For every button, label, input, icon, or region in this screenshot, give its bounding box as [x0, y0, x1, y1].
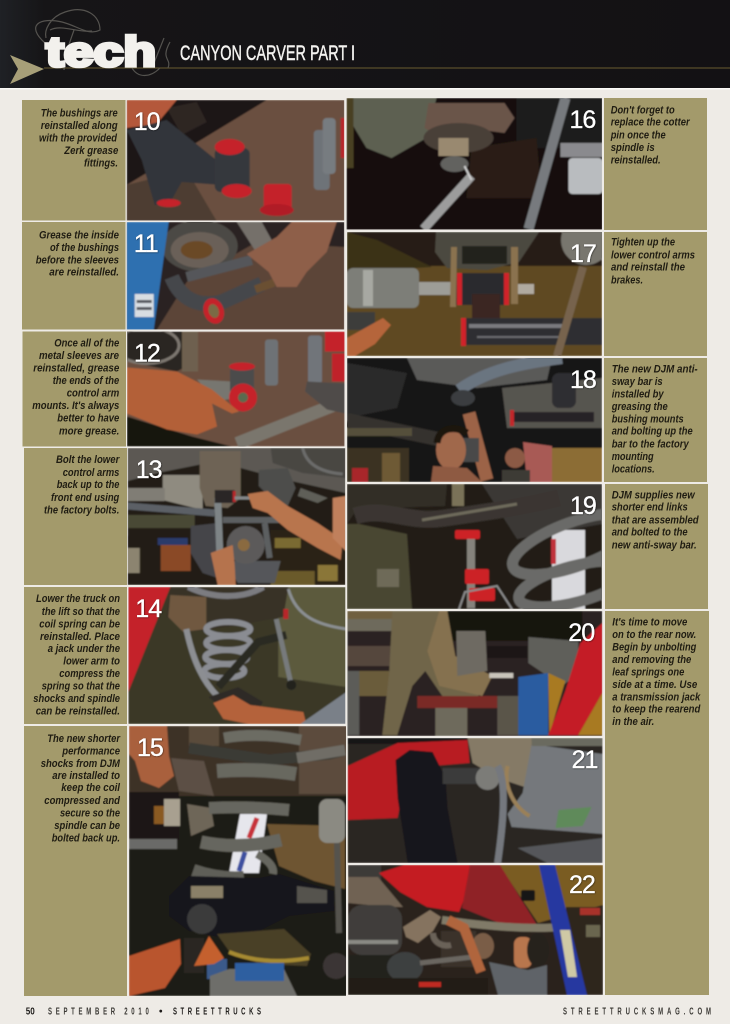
step number: 19 [570, 492, 596, 520]
footer: 50 [26, 1006, 35, 1018]
caption panel: step 14: the lift so that the [42, 606, 120, 618]
caption panel: step 14: a jack under the [48, 643, 120, 655]
caption panel: step 14: shocks and spindle [33, 693, 120, 705]
photo: step 17 [347, 232, 602, 356]
caption panel: step 18: bushing mounts [612, 413, 684, 425]
caption panel: step 12: the ends of the [53, 375, 119, 387]
caption panel: step 14: spring so that the [42, 681, 120, 693]
caption panel: step 15: secure so the [60, 808, 120, 820]
step number: 15 [137, 734, 163, 762]
caption panel: step 11 [22, 222, 126, 330]
caption panel: steps 20 to 22: and removing the [612, 654, 691, 666]
photo: step 14 [128, 587, 346, 724]
caption panel: step 18: bar to the factory [612, 438, 689, 450]
caption panel: step 14: can be reinstalled. [36, 706, 120, 718]
caption panel: steps 20 to 22: side at a time. Use [612, 679, 697, 691]
decorative script flourish [36, 10, 170, 76]
caption panel: step 10: Zerk grease [63, 145, 118, 157]
footer: • [159, 1006, 163, 1018]
photo: step 21 [348, 738, 603, 863]
caption panel: step 13: control arms [63, 467, 119, 479]
caption panel: step 18: installed by [612, 388, 664, 400]
header band [0, 0, 730, 90]
caption panel: step 12: better to have [57, 413, 119, 425]
caption panel: step 18: sway bar is [612, 376, 663, 388]
step number: 17 [570, 240, 596, 268]
caption panel: step 12: Once all of the [54, 338, 119, 350]
caption panel: step 19: new anti-sway bar. [612, 539, 697, 551]
caption panel: step 14: coil spring can be [39, 618, 120, 630]
caption panel: step 18: and bolting up the [612, 426, 693, 438]
caption panel: step 14: compress the [59, 668, 120, 680]
step number: 10 [134, 108, 160, 136]
photo: step 16 [346, 98, 602, 230]
caption panel: step 16: Don't forget to [611, 104, 675, 116]
caption panel: steps 20 to 22: It's time to move [612, 617, 687, 629]
scene [347, 484, 645, 616]
caption panel: step 10: with the provided [39, 133, 118, 145]
scene [348, 738, 603, 863]
caption panel: step 17: brakes. [611, 274, 643, 286]
caption panel: step 13: front end using [51, 492, 119, 504]
caption panel: steps 20 to 22: on to the rear now. [612, 629, 696, 641]
scene [348, 865, 603, 995]
caption panel: step 11: Grease the inside [39, 229, 119, 241]
caption panel: step 18 [604, 358, 707, 482]
photo: step 13 [128, 448, 346, 585]
caption panel: step 15: shocks from DJM [41, 758, 120, 770]
caption panel: step 11: are reinstalled. [49, 267, 119, 279]
caption panel: step 16: replace the cotter [611, 117, 690, 129]
caption panel: step 12: more grease. [59, 425, 119, 437]
step number: 11 [134, 230, 158, 258]
caption panel: step 12 [22, 332, 126, 446]
caption panel: step 11: before the sleeves [36, 254, 119, 266]
caption panel: step 14 [24, 587, 127, 724]
tech logo: tech [46, 28, 156, 75]
caption panel: step 11: of the bushings [50, 242, 119, 254]
caption panel: step 14: Lower the truck on [36, 593, 120, 605]
scene [115, 328, 345, 446]
photo: step 15 [129, 726, 346, 996]
caption panel: steps 20 to 22: Begin by unbolting [612, 641, 696, 653]
caption panel: step 10: The bushings are [41, 108, 118, 120]
caption panel: step 10 [22, 100, 126, 220]
caption panel: step 15: spindle can be [54, 820, 120, 832]
photo: step 19 [347, 484, 602, 609]
step number: 13 [136, 456, 162, 484]
caption panel: step 16: spindle is [611, 142, 655, 154]
caption panel: step 15: keep the coil [61, 782, 121, 794]
scene [129, 726, 349, 996]
scene [347, 611, 602, 736]
step number: 12 [134, 340, 160, 368]
caption panel: step 12: reinstalled, grease [33, 363, 119, 375]
step number: 20 [568, 619, 594, 647]
icon: arrow [10, 55, 44, 84]
step number: 22 [569, 871, 595, 899]
caption panel: step 14: reinstalled. Place [40, 631, 120, 643]
scene [127, 220, 345, 330]
step number: 14 [135, 595, 162, 623]
caption panel: step 18: The new DJM anti- [612, 363, 698, 375]
scene [128, 448, 346, 585]
footer: SEPTEMBER 2010 [48, 1006, 149, 1017]
scene [128, 587, 346, 724]
caption panel: step 17: lower control arms [611, 249, 695, 261]
caption panel: step 12: mounts. It's always [32, 400, 119, 412]
photo: step 22 [348, 865, 603, 995]
caption panel: step 19: and bolted to the [612, 527, 688, 539]
caption panel: step 15: compressed and [44, 795, 121, 807]
caption panel: step 13 [24, 448, 127, 585]
caption panel: step 12: metal sleeves are [39, 350, 119, 362]
caption panel: step 16: reinstalled. [611, 154, 661, 166]
caption panel: step 13: the factory bolts. [44, 504, 119, 516]
photo: step 10 [126, 100, 344, 220]
caption panel: step 16 [604, 98, 707, 230]
caption panel: step 17 [604, 232, 707, 356]
photo: step 18 [347, 358, 602, 482]
photo: step 11 [126, 222, 344, 330]
caption panel: step 19: that are assembled [612, 514, 700, 526]
step number: 18 [570, 366, 596, 394]
caption panel: step 10: fittings. [84, 157, 118, 169]
caption panel: step 19 [605, 484, 708, 609]
caption panel: step 13: back up to the [57, 479, 119, 491]
caption panel: step 15: performance [61, 746, 120, 758]
photo: step 12 [127, 332, 344, 446]
photo: step 20 [347, 611, 602, 736]
caption panel: step 13: Bolt the lower [56, 454, 120, 466]
caption panel: step 15 [24, 726, 127, 996]
footer: STREETTRUCKSMAG.COM [563, 1006, 711, 1017]
footer [26, 1006, 711, 1018]
caption panel: step 17: and reinstall the [611, 262, 685, 274]
scene [346, 98, 602, 230]
caption panel: step 15: are installed to [52, 770, 120, 782]
caption panel: step 19: shorter end links [612, 502, 688, 514]
caption panel: step 15: The new shorter [47, 733, 120, 745]
caption panel: step 18: mounting [612, 451, 654, 463]
caption panel: step 15: bolted back up. [52, 832, 120, 844]
step number: 21 [572, 746, 598, 774]
caption panel: step 17: Tighten up the [611, 237, 675, 249]
scene [347, 215, 611, 356]
caption panel: step 14: lower arm to [63, 656, 120, 668]
caption panel: steps 20 to 22: leaf springs one [612, 667, 684, 679]
scene [347, 358, 602, 482]
footer: STREETTRUCKS [173, 1006, 261, 1017]
caption panel: step 18: locations. [612, 463, 655, 475]
caption panel: steps 20 to 22: to keep the rearend [612, 704, 701, 716]
caption panel: steps 20 to 22: in the air. [612, 716, 654, 728]
caption panel: step 10: reinstalled along [41, 120, 118, 132]
scene [127, 100, 345, 221]
caption panel: step 18: greasing the [611, 401, 668, 413]
step number: 16 [570, 106, 595, 134]
caption panel: step 16: pin once the [610, 129, 666, 141]
caption panel: step 19: DJM supplies new [612, 489, 696, 501]
caption panel: steps 20 to 22: a transmission jack [612, 691, 701, 703]
caption panel: steps 20 to 22 [605, 611, 709, 995]
title: CANYON CARVER PART I [180, 42, 355, 65]
caption panel: step 12: control arm [67, 388, 119, 400]
